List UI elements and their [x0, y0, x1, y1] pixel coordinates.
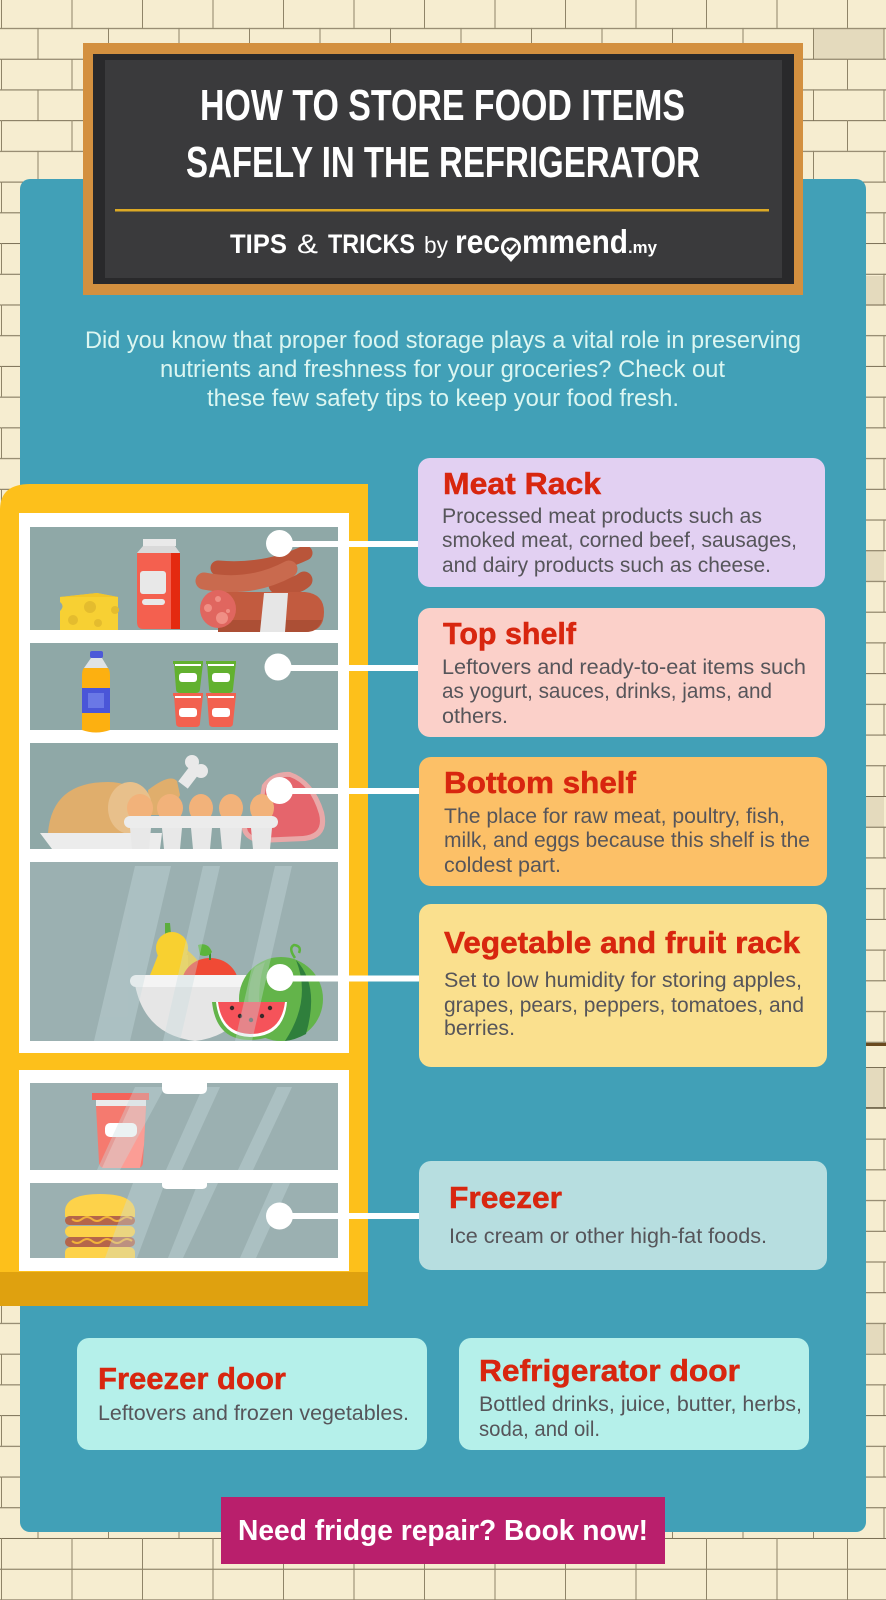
- body text: others.: [442, 704, 508, 728]
- intro text: [85, 327, 801, 412]
- heading: Refrigerator door: [479, 1354, 740, 1388]
- body text: [444, 804, 810, 877]
- icon: roast chicken and plate: [40, 755, 208, 849]
- icon: watermelon slice: [212, 1002, 289, 1040]
- icon: egg tray: [124, 794, 278, 849]
- call to action button: Need fridge repair? Book now!: [238, 1515, 648, 1547]
- title line 2: SAFELY IN THE REFRIGERATOR: [186, 138, 700, 187]
- call to action button: [221, 1497, 665, 1564]
- icon: fruit bowl: [130, 975, 255, 1041]
- panel: freezer door: [77, 1338, 427, 1450]
- subtitle: tips and tricks: mmend: [522, 223, 628, 260]
- body text: grapes, pears, peppers, tomatoes, and: [444, 993, 804, 1017]
- body text: [444, 968, 804, 1040]
- heading: Freezer door: [98, 1362, 286, 1396]
- body text: Set to low humidity for storing apples,: [444, 968, 802, 992]
- panel: freezer: [419, 1161, 827, 1270]
- connector: bottom shelf: [266, 777, 420, 804]
- title line 1: HOW TO STORE FOOD ITEMS: [200, 81, 685, 130]
- panel: vegetable and fruit rack: [419, 904, 827, 1067]
- panel: chalkboard title: [83, 43, 803, 295]
- icon: cheese: [60, 593, 119, 630]
- intro text: nutrients and freshness for your groceries? Check out: [160, 356, 725, 383]
- icon: apple: [182, 944, 238, 1008]
- icon: sausages: [200, 553, 324, 632]
- connector: top shelf: [264, 654, 420, 680]
- body text: smoked meat, corned beef, sausages,: [442, 528, 797, 552]
- body text: soda, and oil.: [479, 1417, 600, 1441]
- subtitle: tips and tricks: TRICKS: [328, 229, 415, 259]
- panel: top shelf: [418, 608, 825, 737]
- body text: and dairy products such as cheese.: [442, 553, 771, 577]
- body text: as yogurt, sauces, drinks, jams, and: [442, 679, 772, 703]
- icon: raw meat: [242, 772, 325, 843]
- refrigerator illustration: [0, 484, 368, 1306]
- intro text: Did you know that proper food storage plays a vital role in preserving: [85, 327, 801, 354]
- connector: vegetable rack: [266, 964, 420, 991]
- icon: milk carton: [137, 539, 180, 629]
- panel: bottom shelf: [419, 757, 827, 886]
- connector: meat rack: [266, 530, 420, 557]
- subtitle: tips and tricks: .my: [628, 238, 658, 257]
- panel: meat rack: [418, 458, 825, 587]
- body text: Leftovers and ready-to-eat items such: [442, 655, 806, 679]
- intro text: these few safety tips to keep your food fresh.: [207, 385, 679, 412]
- body text: milk, and eggs because this shelf is the: [444, 828, 810, 852]
- icon: burger: [65, 1194, 135, 1258]
- body text: Bottled drinks, juice, butter, herbs,: [479, 1392, 802, 1416]
- panel: refrigerator door: [459, 1338, 809, 1450]
- body text: The place for raw meat, poultry, fish,: [444, 804, 785, 828]
- body text: berries.: [444, 1016, 515, 1040]
- body text: Ice cream or other high-fat foods.: [449, 1224, 767, 1248]
- icon: watermelon: [239, 945, 323, 1041]
- body text: coldest part.: [444, 853, 561, 877]
- subtitle: tips and tricks: rec: [455, 223, 500, 260]
- subtitle: tips and tricks: TIPS: [230, 229, 287, 259]
- icon: yogurt cup in freezer: [92, 1093, 149, 1168]
- heading: Top shelf: [443, 617, 577, 651]
- heading: Bottom shelf: [444, 766, 637, 800]
- connector: freezer: [266, 1202, 420, 1230]
- body text: Processed meat products such as: [442, 504, 762, 528]
- body text: [442, 504, 797, 577]
- glass reflections: [94, 866, 292, 1258]
- freezer handles: [162, 1083, 207, 1189]
- heading: Freezer: [449, 1181, 562, 1215]
- heading: Meat Rack: [443, 467, 601, 501]
- subtitle: tips and tricks: by: [424, 232, 448, 258]
- heading: Vegetable and fruit rack: [444, 926, 800, 960]
- subtitle: tips and tricks: &: [297, 229, 318, 259]
- icon: yogurt cups: [173, 661, 236, 727]
- subtitle: tips and tricks: [230, 223, 658, 262]
- icon: pears: [150, 923, 203, 975]
- body text: [442, 655, 806, 728]
- body text: Leftovers and frozen vegetables.: [98, 1401, 409, 1425]
- icon: juice bottle: [82, 651, 110, 732]
- body text: [479, 1392, 802, 1441]
